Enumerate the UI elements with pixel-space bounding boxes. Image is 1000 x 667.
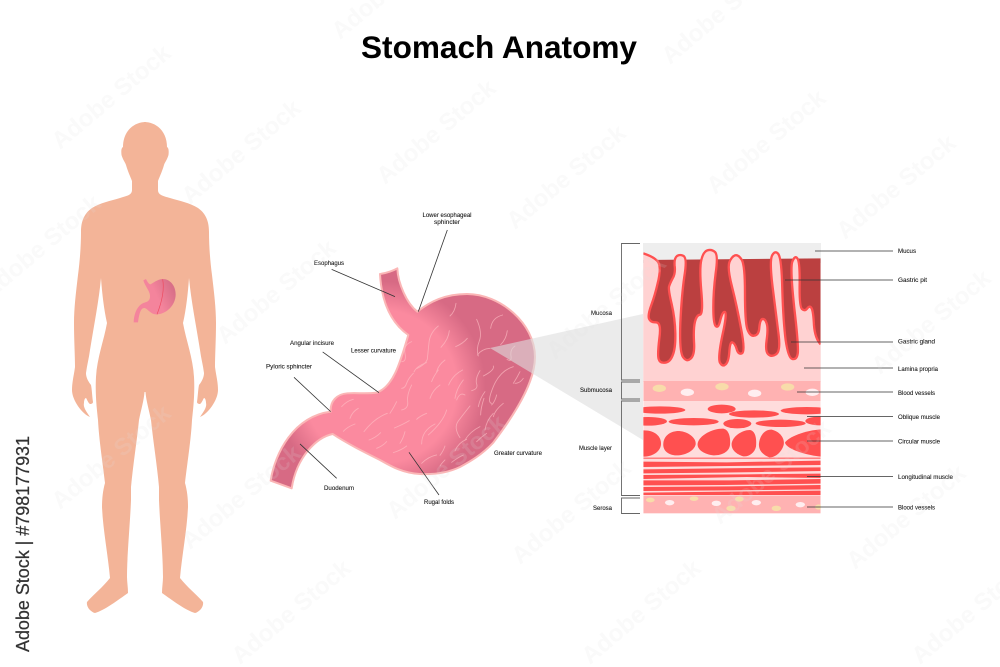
watermark: Adobe Stock [707,414,837,530]
stomach labels: Pyloric sphincter [266,364,313,370]
stomach labels: Greater curvature [494,450,542,457]
stomach labels [266,212,542,506]
small stomach on body [134,279,176,322]
panel labels: Lamina propria [898,366,938,373]
watermark: Adobe Stock [542,249,672,365]
stomach labels: Lower esophageal [422,212,472,219]
watermark: Adobe Stock [702,84,832,200]
panel labels: Gastric pit [898,277,927,284]
panel labels: Oblique muscle [898,414,940,421]
stock credit: Adobe Stock | #798177931 [13,436,33,652]
body silhouette [72,122,218,613]
muscle layer background [643,401,821,496]
watermark: Adobe Stock [212,234,342,350]
panel labels: Longitudinal muscle [898,474,953,481]
panel labels: Gastric gland [898,338,935,346]
oblique muscle [643,404,821,428]
watermark: Adobe Stock [577,554,707,667]
title: Stomach Anatomy [361,30,638,65]
stomach labels: Duodenum [324,485,354,492]
watermark: Adobe Stock [507,454,637,570]
watermark: Adobe Stock [47,39,177,155]
stomach labels: sphincter [434,219,461,226]
mucosa glands and pits [643,250,821,382]
serosa [643,496,822,513]
stomach labels: Lesser curvature [351,348,396,354]
panel labels [898,248,953,511]
stomach labels: Esophagus [314,260,344,267]
circular muscle [643,429,822,457]
stomach leader lines [294,230,447,495]
watermark: Adobe Stock [227,554,357,667]
stomach labels: Angular incisure [290,340,334,347]
watermark: Adobe Stock [867,264,997,380]
stomach shape [271,268,535,488]
submucosa [643,381,821,401]
large stomach illustration [271,268,535,488]
layer labels: Submucosa [580,387,612,394]
layer labels: Mucosa [591,310,612,317]
lower tissue layers [643,381,821,514]
watermark: Adobe Stock [832,129,962,245]
layer labels [579,310,613,512]
mucus layer [643,243,821,263]
panel labels: Blood vessels [898,504,935,512]
zoom cone [490,314,643,440]
panel labels: Mucus [898,248,916,255]
layer brackets [622,244,640,514]
watermark: Adobe Stock [47,399,177,515]
rugal folds [342,303,523,466]
watermark: Adobe Stock [502,119,632,235]
watermark: Adobe Stock [177,439,307,555]
layer labels: Muscle layer [579,445,613,452]
watermark: Adobe Stock [372,74,502,190]
layer labels: Serosa [593,505,612,512]
watermark: Adobe Stock [382,409,512,525]
watermark: Adobe Stock [842,459,972,575]
panel labels: Blood vessels [898,390,935,397]
panel labels: Circular muscle [898,438,940,446]
panel leader lines [785,251,893,507]
watermark: Adobe Stock [177,94,307,210]
tissue cross-section panel [643,243,821,514]
longitudinal muscle [643,458,821,495]
stomach labels: Rugal folds [424,499,454,506]
